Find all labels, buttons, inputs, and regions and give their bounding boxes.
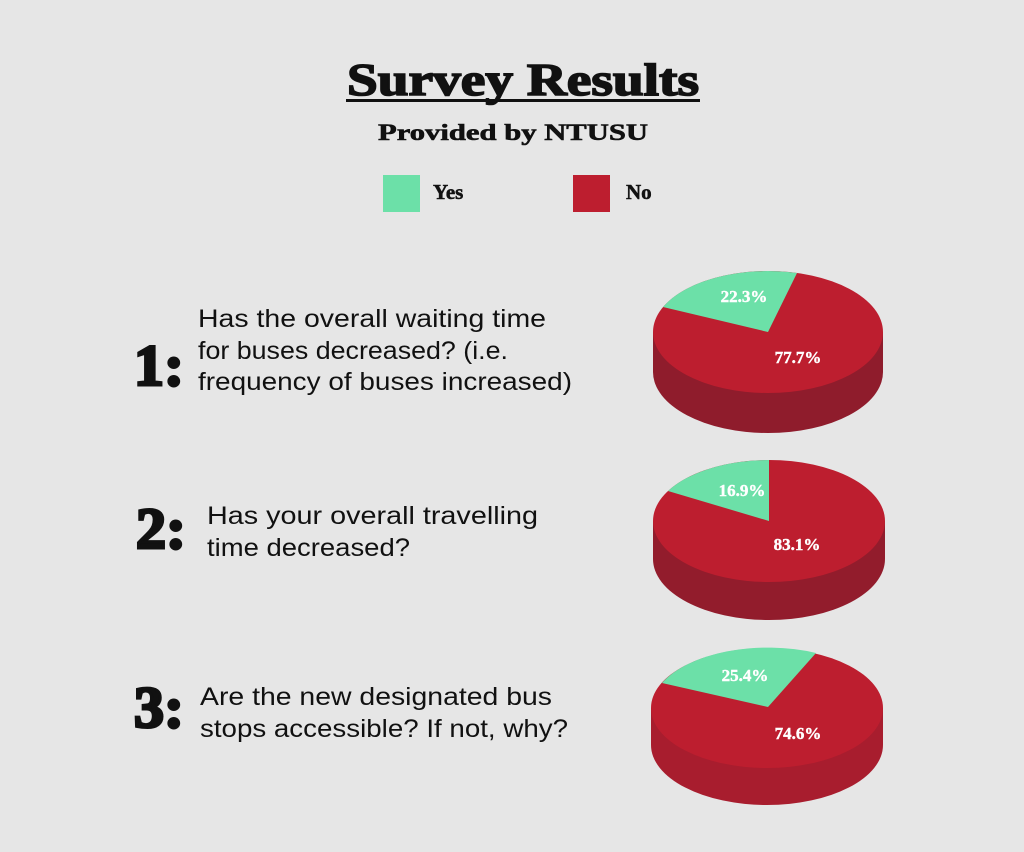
question 3: stops accessible? If not, why?: [200, 715, 568, 743]
pie chart 2: 16.9%: [719, 481, 765, 500]
question 2: [136, 496, 538, 562]
legend: [383, 175, 652, 212]
pie chart 1: 22.3%: [721, 287, 767, 306]
pie chart 3: 25.4%: [722, 666, 768, 685]
pie chart 3: 74.6%: [775, 724, 821, 743]
subtitle: Provided by NTUSU: [378, 120, 649, 145]
question 1: Has the overall waiting time: [198, 305, 546, 333]
question 2: Has your overall travelling: [207, 502, 538, 530]
pie chart 2: 83.1%: [774, 535, 820, 554]
pie chart 1: [653, 271, 883, 433]
question 3: Are the new designated bus: [200, 683, 552, 711]
question 1: 1:: [134, 333, 184, 398]
question 1: frequency of buses increased): [198, 368, 572, 396]
question 3: 3:: [134, 675, 184, 740]
question 3: [134, 675, 568, 743]
question 1: for buses decreased? (i.e.: [198, 337, 508, 365]
title: Survey Results: [347, 55, 699, 105]
legend: Yes: [433, 180, 463, 204]
pie chart 3: [651, 648, 883, 805]
pie chart 2: [653, 460, 885, 620]
question 2: time decreased?: [207, 534, 410, 562]
question 1: [134, 305, 572, 398]
pie chart 1: 77.7%: [775, 348, 821, 367]
legend: No: [626, 180, 652, 204]
question 2: 2:: [136, 496, 186, 561]
